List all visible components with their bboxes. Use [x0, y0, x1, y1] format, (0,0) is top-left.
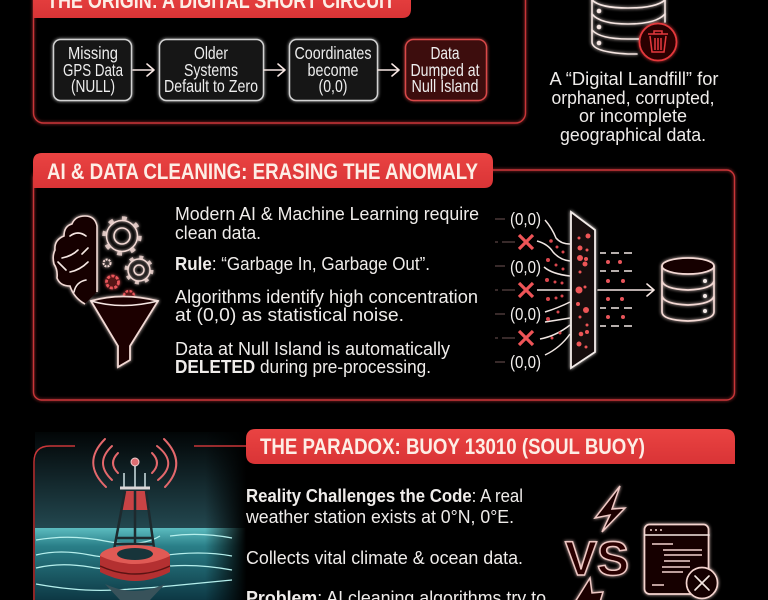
particles left: [545, 239, 564, 340]
text: paradox description: Reality Challenges the Code: A real: [246, 485, 523, 506]
arrow: [378, 64, 399, 76]
labels: zero coordinates: (0,0): [510, 352, 541, 372]
text: AI and machine learning: DELETED during pre-processing.: [175, 356, 431, 377]
icon: versus with lightning: VS: [565, 533, 629, 586]
icon: red crosses: [519, 235, 533, 345]
arrow: [133, 64, 154, 76]
icon: database with trash: [592, 0, 676, 60]
text: AI and machine learning: at (0,0) as statistical noise.: [175, 304, 404, 325]
step: missing GPS data: Missing: [68, 43, 118, 63]
icon: code window with error: [644, 524, 718, 598]
step: missing GPS data: GPS Data: [63, 60, 123, 80]
icon: brain, gears and funnel: [53, 216, 158, 367]
text: digital landfill: or incomplete: [579, 105, 687, 126]
text: digital landfill: geographical data.: [560, 124, 706, 145]
heading: AI and data cleaning: AI & DATA CLEANING: ERASING THE ANOMALY: [47, 159, 478, 184]
text: digital landfill: A “Digital Landfill” for: [550, 68, 718, 89]
panel: the paradox: [245, 429, 735, 600]
step: older systems: [160, 40, 264, 100]
text: paradox description: [245, 485, 546, 600]
labels: zero coordinates: (0,0): [510, 209, 541, 229]
clean output lines: [600, 253, 632, 326]
heading: the paradox: [246, 429, 735, 464]
sea: [35, 528, 246, 600]
step: data dumped: Data: [430, 43, 460, 63]
dashes left: [495, 219, 515, 362]
step: missing GPS data: [54, 40, 132, 100]
panel: AI and data cleaning: [33, 153, 734, 400]
signal waves: [93, 439, 176, 487]
labels: zero coordinates: (0,0): [510, 257, 541, 277]
heading: the origin: [33, 0, 411, 18]
step: coordinates: become: [308, 60, 358, 80]
step: coordinates: [290, 40, 378, 100]
step: data dumped: Dumped at: [410, 60, 480, 80]
text: AI and machine learning: clean data.: [175, 222, 261, 243]
waves: [36, 534, 232, 590]
text: paradox description: weather station exists at 0°N, 0°E.: [245, 506, 514, 527]
chart: data filter diagram: [495, 209, 714, 372]
text: paradox description: Collects vital climate & ocean data.: [246, 547, 523, 568]
panel: the origin: [33, 0, 526, 123]
text: digital landfill: [550, 68, 718, 145]
icon: versus with lightning: [565, 486, 629, 600]
text: AI and machine learning: Rule: “Garbage In, Garbage Out”.: [175, 253, 430, 274]
step: data dumped: Null Island: [412, 76, 478, 96]
buoy: [100, 458, 170, 600]
step: missing GPS data: (NULL): [71, 76, 115, 96]
labels: zero coordinates: (0,0): [510, 304, 541, 324]
text: digital landfill: orphaned, corrupted,: [552, 87, 714, 108]
arrow: [264, 64, 285, 76]
labels: zero coordinates: [510, 209, 541, 372]
step: data dumped: [406, 40, 486, 100]
sky: [35, 432, 246, 529]
heading: AI and data cleaning: [33, 153, 493, 188]
right edge fade: [205, 430, 246, 600]
filter slab: [571, 212, 595, 368]
illustration: weather buoy at sea: [34, 430, 246, 600]
step: coordinates: Coordinates: [294, 43, 372, 63]
arrow: [598, 284, 654, 296]
step: older systems: Default to Zero: [164, 76, 258, 96]
text: AI and machine learning: Data at Null Island is automatically: [175, 338, 451, 359]
step: older systems: Older: [194, 43, 228, 63]
streams into filter: [537, 220, 571, 355]
step: older systems: Systems: [184, 60, 238, 80]
icon: database: [662, 258, 714, 321]
step: coordinates: (0,0): [318, 76, 348, 96]
particles right: [606, 260, 625, 319]
text: AI and machine learning: Algorithms identify high concentration: [175, 286, 478, 307]
heading: the paradox: THE PARADOX: BUOY 13010 (SOUL BUOY): [260, 434, 645, 459]
border: [34, 446, 246, 600]
text: AI and machine learning: [175, 203, 479, 377]
text: AI and machine learning: Modern AI & Machine Learning require: [175, 203, 479, 224]
